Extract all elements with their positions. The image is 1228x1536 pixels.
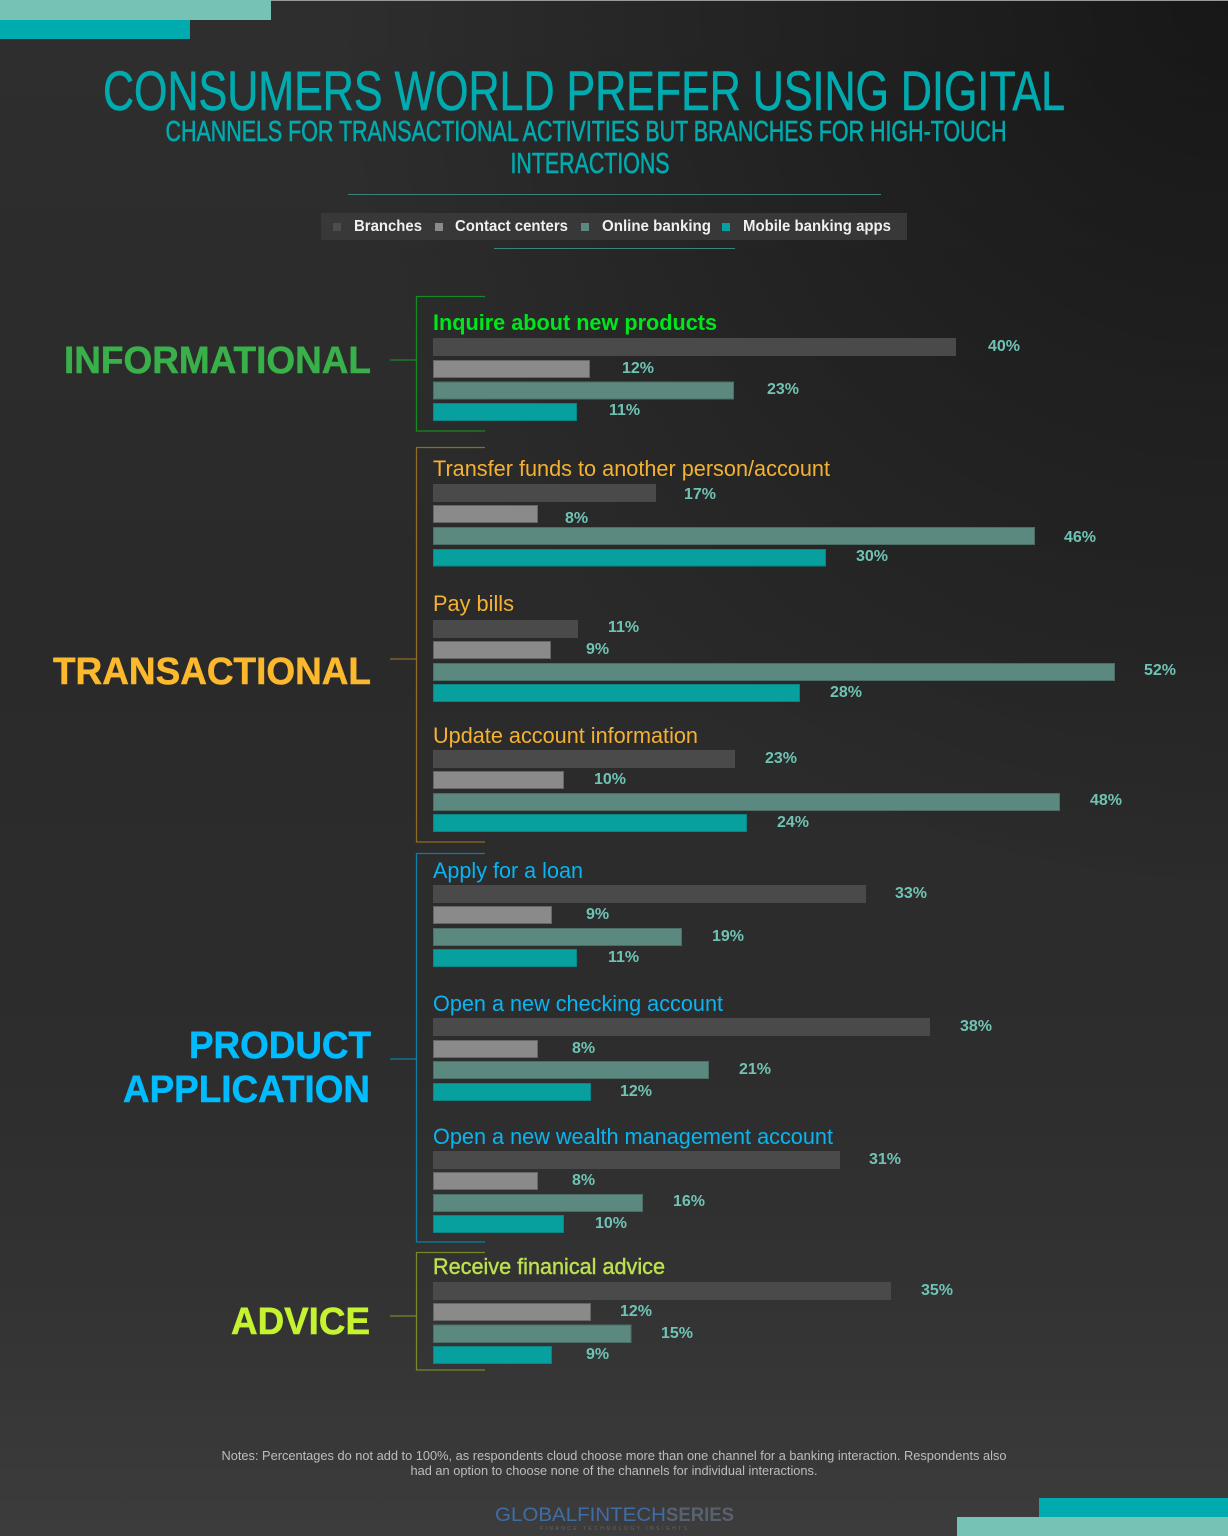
panel: open a new wealth management account — [433, 1124, 901, 1232]
panel: open a new wealth management account: 10% — [595, 1215, 627, 1232]
panel: apply for a loan: 11% — [608, 949, 639, 966]
panel: update account information: 48% — [1090, 792, 1122, 809]
panel: inquire about new products: 12% — [622, 360, 654, 377]
panel: pay bills: 9% — [586, 641, 609, 658]
panel: inquire about new products: 11% — [609, 402, 640, 419]
panel: open a new checking account: 12% — [620, 1083, 652, 1100]
panel: transfer funds: Transfer funds to another person/account — [433, 456, 830, 481]
logo — [495, 1505, 734, 1532]
footnote — [222, 1449, 1007, 1478]
panel: inquire about new products — [433, 310, 1020, 420]
panel: receive financial advice: 12% — [620, 1303, 652, 1320]
category: informational: INFORMATIONAL — [64, 340, 371, 382]
footnote: had an option to choose none of the channels for individual interactions. — [410, 1464, 818, 1478]
legend — [321, 213, 907, 240]
panel: pay bills — [433, 591, 1176, 702]
category: transactional: TRANSACTIONAL — [53, 651, 371, 693]
legend: Online banking — [602, 218, 711, 235]
logo: SERIES — [666, 1505, 734, 1526]
logo: GLOBALFINTECH — [495, 1505, 666, 1526]
panel: pay bills: 11% — [608, 619, 639, 636]
footnote: Notes: Percentages do not add to 100%, as respondents cloud choose more than one channel for a banking interaction. Respondents also — [222, 1449, 1007, 1463]
panel: pay bills: 28% — [830, 684, 862, 701]
panel: receive financial advice: 35% — [921, 1282, 953, 1299]
category: product application — [123, 1025, 371, 1111]
category: product application: APPLICATION — [123, 1069, 370, 1111]
panel: open a new checking account — [433, 991, 992, 1100]
panel: transfer funds: 30% — [856, 548, 888, 565]
panel: open a new wealth management account: Open a new wealth management account — [433, 1124, 833, 1149]
panel: open a new checking account: 38% — [960, 1018, 992, 1035]
title — [103, 59, 1065, 180]
legend: Branches — [354, 218, 422, 235]
panel: update account information: 23% — [765, 750, 797, 767]
panel: transfer funds: 46% — [1064, 529, 1096, 546]
panel: apply for a loan: 9% — [586, 906, 609, 923]
panel: receive financial advice: Receive finanical advice — [433, 1254, 665, 1279]
panel: receive financial advice: 15% — [661, 1325, 693, 1342]
legend: Mobile banking apps — [743, 218, 891, 235]
bracket: informational — [390, 296, 485, 431]
panel: receive financial advice — [433, 1254, 953, 1364]
panel: transfer funds: 17% — [684, 486, 716, 503]
panel: transfer funds — [433, 456, 1096, 566]
category: product application: PRODUCT — [189, 1025, 371, 1067]
panel: apply for a loan: 19% — [712, 928, 744, 945]
logo: FINANCE TECHNOLOGY INSIGHTS — [540, 1526, 688, 1532]
panel: update account information — [433, 723, 1122, 832]
panel: open a new checking account: 8% — [572, 1040, 595, 1057]
panel: open a new wealth management account: 8% — [572, 1172, 595, 1189]
panel: open a new checking account: 21% — [739, 1061, 771, 1078]
panel: open a new checking account: Open a new checking account — [433, 991, 723, 1016]
panel: pay bills: 52% — [1144, 662, 1176, 679]
bracket: transactional — [390, 448, 485, 842]
panel: apply for a loan: 33% — [895, 885, 927, 902]
panel: inquire about new products: 40% — [988, 338, 1020, 355]
panel: apply for a loan: Apply for a loan — [433, 858, 583, 883]
bracket: product application — [390, 854, 485, 1242]
panel: update account information: Update account information — [433, 723, 698, 748]
panel: inquire about new products: 23% — [767, 381, 799, 398]
panel: open a new wealth management account: 31% — [869, 1151, 901, 1168]
bottom-right accent bars — [957, 1498, 1228, 1536]
panel: open a new wealth management account: 16% — [673, 1193, 705, 1210]
panel: inquire about new products: Inquire about new products — [433, 310, 717, 335]
panel: apply for a loan — [433, 858, 927, 966]
category: advice: ADVICE — [231, 1301, 370, 1343]
panel: update account information: 10% — [594, 771, 626, 788]
bracket: advice — [390, 1252, 485, 1370]
legend: Contact centers — [455, 218, 568, 235]
panel: transfer funds: 8% — [565, 510, 588, 527]
panel: pay bills: Pay bills — [433, 591, 514, 616]
top-left accent bars — [0, 0, 271, 39]
panel: receive financial advice: 9% — [586, 1346, 609, 1363]
panel: update account information: 24% — [777, 814, 809, 831]
title: INTERACTIONS — [510, 148, 670, 180]
